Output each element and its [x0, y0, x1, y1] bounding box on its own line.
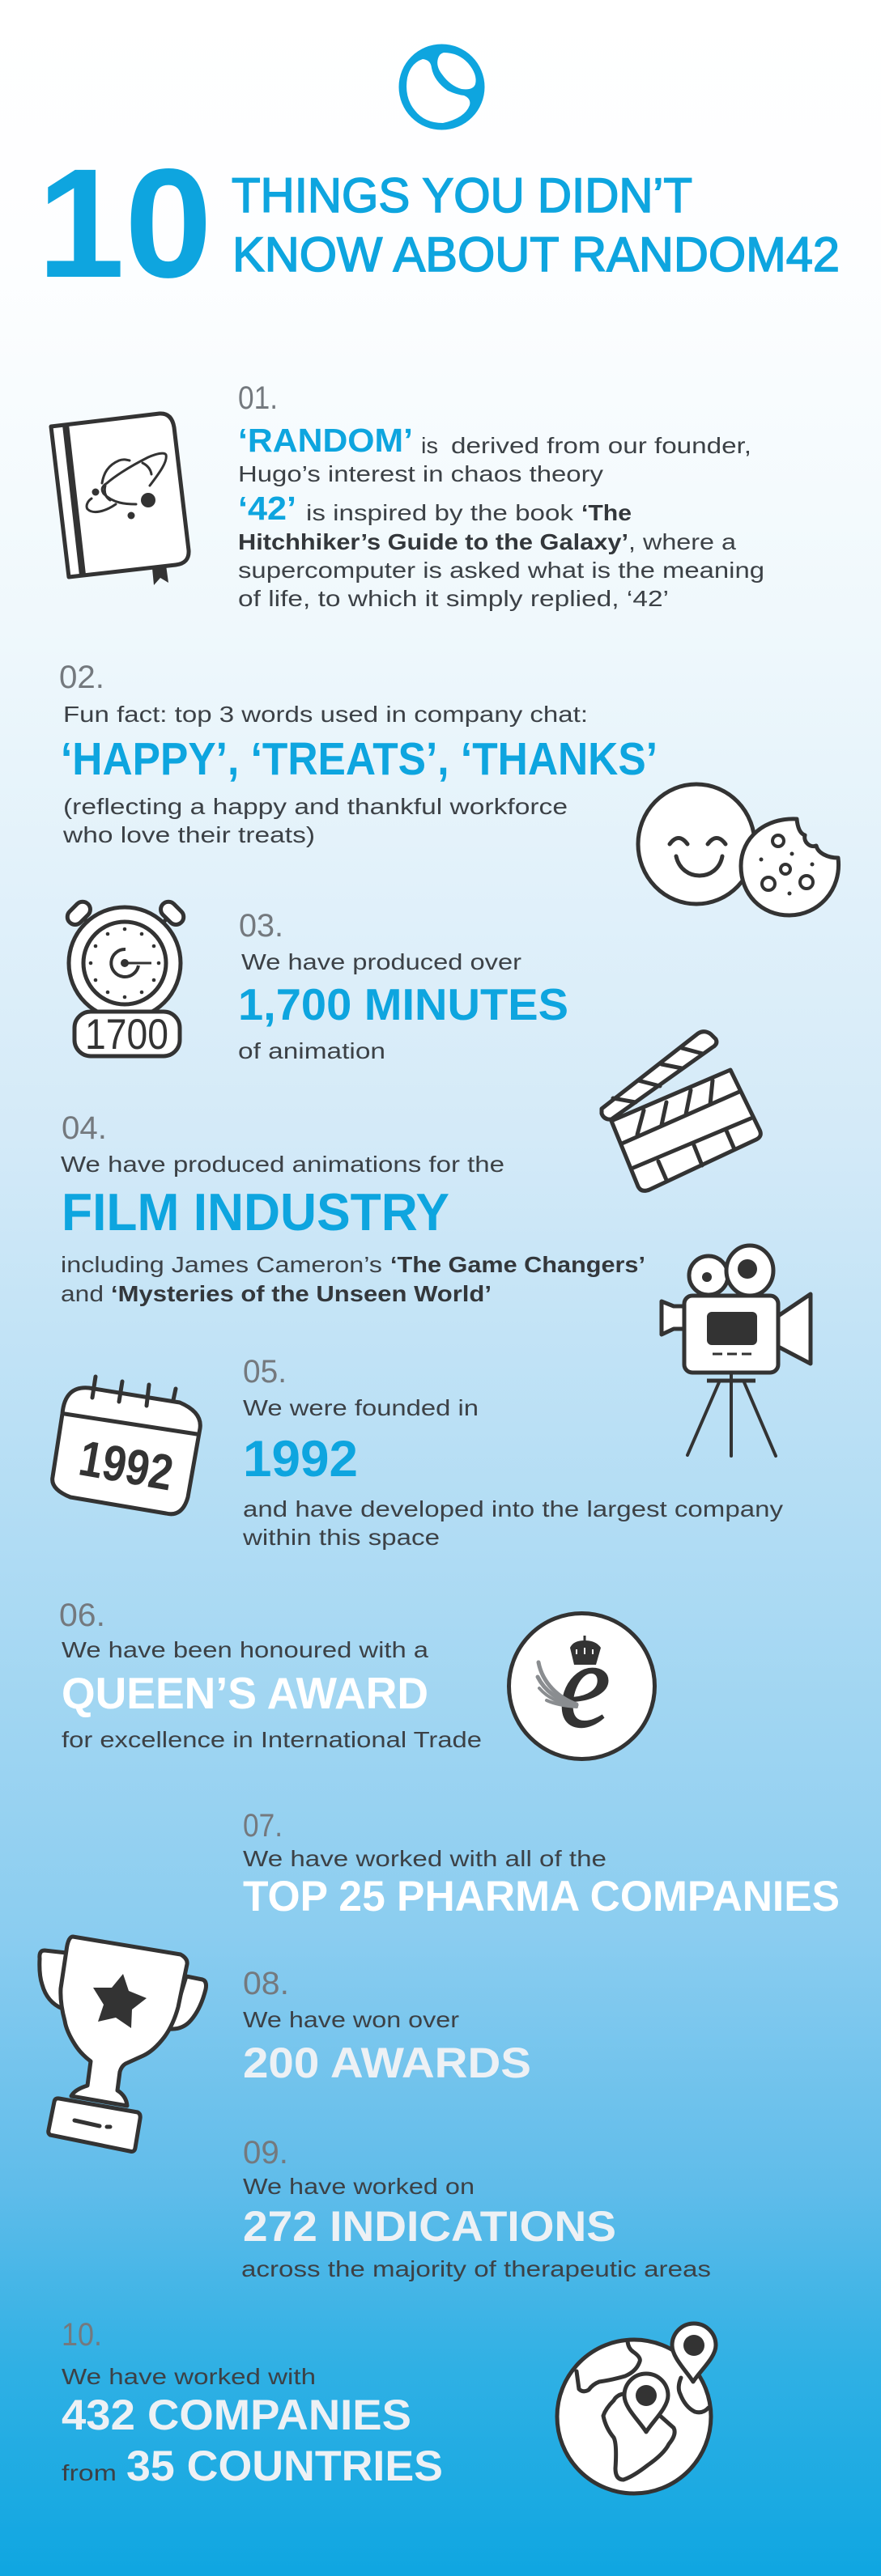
title text: KNOW ABOUT RANDOM42 — [232, 227, 840, 282]
fact 01 text: ‘42’ — [238, 490, 296, 527]
panel: fact 07 — [243, 1808, 840, 1920]
fact 01 text: Hugo’s interest in chaos theory — [238, 461, 603, 486]
fact 10 headline — [62, 2391, 443, 2490]
icon: trophy — [40, 1937, 206, 2151]
fact 09 note: across the majority of therapeutic areas — [241, 2256, 711, 2281]
fact 02 note — [62, 794, 568, 847]
fact 10 headline: 432 COMPANIES — [62, 2391, 411, 2439]
fact 03 note: of animation — [238, 1038, 385, 1063]
fact 01 text: , where a — [628, 529, 736, 554]
fact 06 note: for excellence in International Trade — [62, 1727, 482, 1752]
title numeral: 10 — [37, 136, 212, 310]
panel: fact 05 — [242, 1354, 783, 1550]
fact 02 note: (reflecting a happy and thankful workforce — [63, 794, 568, 819]
fact 08 intro: We have won over — [243, 2007, 459, 2032]
fact 05 note — [242, 1496, 783, 1550]
fact 04 intro: We have produced animations for the — [61, 1152, 504, 1177]
fact 07 headline: TOP 25 PHARMA COMPANIES — [243, 1873, 840, 1920]
fact 01 text: is inspired by the book — [306, 500, 574, 525]
fact 05 note: and have developed into the largest company — [243, 1496, 783, 1521]
fact 04 note: and — [61, 1281, 104, 1306]
fact 03 intro: We have produced over — [241, 949, 521, 974]
panel: fact 10 — [62, 2317, 443, 2490]
number 07: 07. — [243, 1808, 283, 1844]
icon: smiley face and cookie — [638, 784, 839, 915]
number 01: 01. — [238, 380, 278, 416]
fact 04 note: ‘Mysteries of the Unseen World’ — [111, 1281, 492, 1306]
icon: globe with location pins — [557, 2323, 716, 2493]
fact 10 headline: from — [62, 2460, 117, 2485]
fact 02 intro: Fun fact: top 3 words used in company chat: — [63, 702, 588, 727]
icon: Random42 logo — [398, 44, 484, 129]
icon: calendar 1992: 1992 — [75, 1430, 177, 1502]
panel: fact 04 — [61, 1110, 645, 1306]
panel: fact 03 — [238, 908, 568, 1063]
icon: film camera on tripod — [662, 1246, 811, 1456]
number 10: 10. — [62, 2317, 102, 2353]
icon: clock with digital display: 1700 — [85, 1011, 168, 1059]
fact 01 text: derived from our founder, — [451, 433, 751, 458]
fact 01 text: ‘RANDOM’ — [238, 422, 413, 459]
fact 10 headline: 35 COUNTRIES — [126, 2442, 443, 2490]
fact 01 text — [238, 422, 764, 611]
fact 08 headline: 200 AWARDS — [243, 2039, 531, 2087]
fact 05 intro: We were founded in — [243, 1395, 479, 1420]
panel: fact 02 — [59, 660, 658, 847]
title text — [232, 168, 840, 282]
number 02: 02. — [59, 660, 104, 695]
fact 01 text: ‘The — [581, 500, 632, 525]
fact 07 intro: We have worked with all of the — [243, 1846, 606, 1871]
fact 04 headline: FILM INDUSTRY — [62, 1182, 449, 1241]
number 06: 06. — [59, 1598, 105, 1633]
fact 04 note: including James Cameron’s — [61, 1252, 382, 1277]
fact 09 intro: We have worked on — [243, 2174, 475, 2199]
fact 01 text: of life, to which it simply replied, ‘42’ — [238, 586, 669, 611]
number 08: 08. — [243, 1966, 289, 2001]
fact 02 headline: ‘HAPPY’, ‘TREATS’, ‘THANKS’ — [61, 733, 658, 785]
number 05: 05. — [243, 1354, 287, 1390]
title text: THINGS YOU DIDN’T — [232, 168, 692, 223]
panel: fact 09 — [241, 2135, 711, 2281]
fact 01 text: Hitchhiker’s Guide to the Galaxy’ — [238, 529, 628, 554]
title — [37, 136, 840, 310]
fact 03 headline: 1,700 MINUTES — [238, 979, 568, 1029]
icon: Queen's Award emblem — [509, 1614, 654, 1759]
fact 01 text: is — [421, 433, 438, 458]
fact 05 headline: 1992 — [243, 1431, 358, 1487]
fact 10 intro: We have worked with — [62, 2364, 316, 2389]
fact 06 intro: We have been honoured with a — [62, 1637, 428, 1662]
panel: fact 08 — [243, 1966, 531, 2087]
fact 06 headline: QUEEN’S AWARD — [62, 1668, 428, 1718]
number 04: 04. — [62, 1110, 107, 1146]
icon: Queen's Award emblem: e — [559, 1617, 611, 1753]
icon: calendar 1992 — [53, 1377, 200, 1514]
number 09: 09. — [243, 2135, 288, 2171]
fact 09 headline: 272 INDICATIONS — [243, 2203, 616, 2251]
fact 01 text: supercomputer is asked what is the meaning — [238, 558, 764, 583]
fact 04 note: ‘The Game Changers’ — [390, 1252, 645, 1277]
panel: fact 06 — [59, 1598, 482, 1752]
panel: fact 01 — [238, 380, 764, 611]
fact 02 note: who love their treats) — [62, 822, 315, 847]
icon: clock with digital display — [64, 898, 187, 1059]
fact 04 note — [61, 1252, 645, 1306]
fact 05 note: within this space — [242, 1525, 440, 1550]
icon: notebook with planet — [51, 414, 189, 585]
icon: clapperboard — [602, 1032, 760, 1190]
number 03: 03. — [239, 908, 283, 944]
